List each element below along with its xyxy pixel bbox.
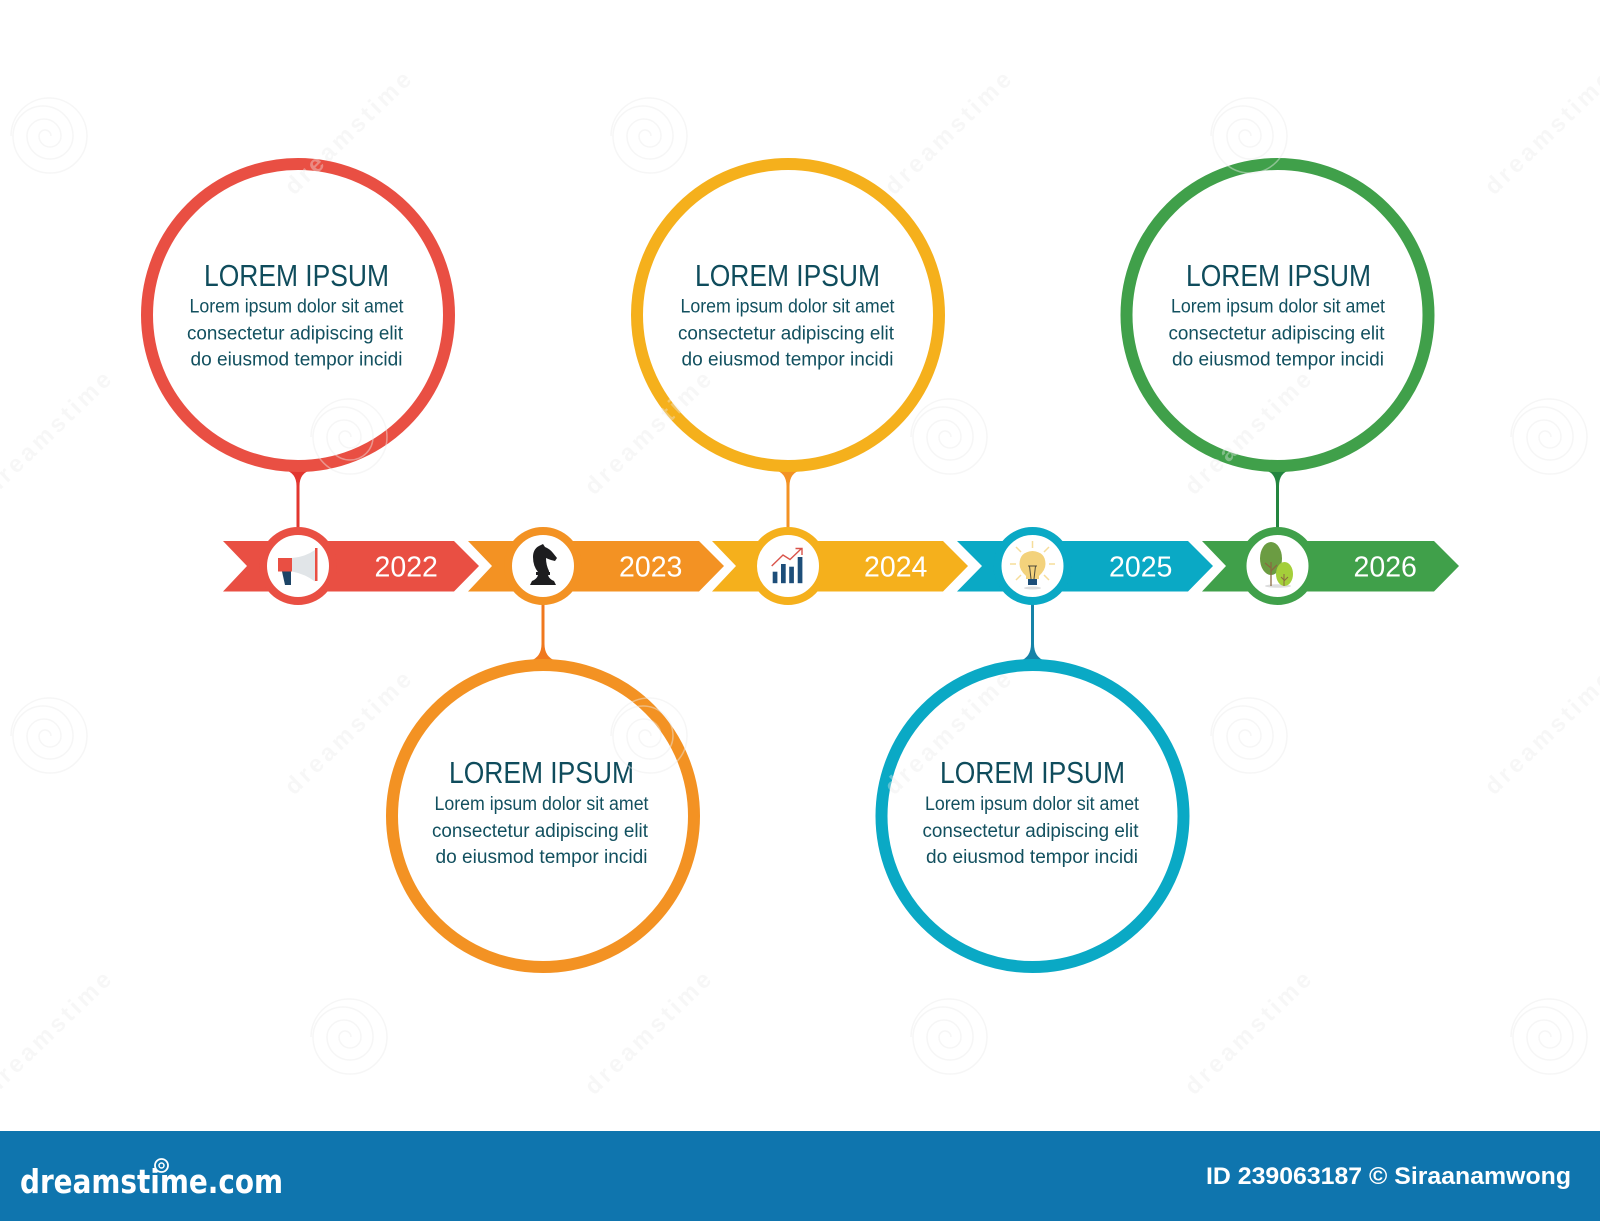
panel: 2025 callout bbox=[882, 604, 1184, 967]
text block: 2026: do eiusmod tempor incidi bbox=[1172, 350, 1384, 370]
text block: 2023: Lorem ipsum dolor sit amet bbox=[434, 794, 649, 815]
ring: 2025 bbox=[882, 665, 1184, 967]
node: 2026 bbox=[1242, 531, 1312, 601]
footer logo: dreamstime.com bbox=[20, 1162, 283, 1201]
text block: 2025: do eiusmod tempor incidi bbox=[926, 847, 1138, 868]
timeline segment: 2023 bbox=[468, 531, 724, 601]
icon: trees bbox=[1260, 542, 1293, 588]
connector: 2024 bbox=[775, 470, 801, 528]
text block: 2023 bbox=[432, 794, 649, 868]
connector: 2026 bbox=[1265, 470, 1290, 528]
year: 2026: 2026 bbox=[1354, 552, 1417, 584]
text block: 2022 bbox=[187, 296, 404, 370]
text block: 2026: consectetur adipiscing elit bbox=[1168, 324, 1385, 344]
text block: 2023: do eiusmod tempor incidi bbox=[436, 847, 648, 868]
watermark layer: dreamstime bbox=[1179, 366, 1317, 500]
year: 2022: 2022 bbox=[374, 552, 438, 584]
icon: light bulb bbox=[1010, 541, 1055, 590]
timeline segment: 2026 bbox=[1202, 531, 1459, 601]
text block: 2024: consectetur adipiscing elit bbox=[678, 324, 895, 344]
year: 2024: 2024 bbox=[864, 552, 928, 584]
connector: 2022 bbox=[285, 470, 311, 528]
text block: 2025 bbox=[922, 794, 1140, 868]
node: 2022 bbox=[263, 531, 333, 601]
heading: 2023: LOREM IPSUM bbox=[449, 755, 634, 790]
text block: 2024: do eiusmod tempor incidi bbox=[682, 350, 894, 370]
text block: 2022: consectetur adipiscing elit bbox=[187, 324, 404, 344]
arrow ribbon: 2026 bbox=[1202, 541, 1459, 592]
icon: chess knight bbox=[530, 544, 557, 585]
panel: 2026 callout bbox=[1126, 164, 1428, 528]
node: 2023 bbox=[508, 531, 578, 601]
text block: 2023: consectetur adipiscing elit bbox=[432, 821, 649, 842]
year: 2023: 2023 bbox=[619, 552, 682, 584]
timeline segment: 2022 bbox=[223, 531, 479, 601]
year: 2025: 2025 bbox=[1109, 552, 1172, 584]
footer bar bbox=[0, 1131, 1600, 1221]
watermark layer: dreamstime bbox=[879, 666, 1017, 800]
watermark layer: dreamstime bbox=[279, 666, 417, 800]
arrow ribbon: 2023 bbox=[468, 541, 724, 592]
arrow ribbon: 2025 bbox=[957, 541, 1213, 592]
arrow ribbon: 2024 bbox=[712, 541, 968, 592]
text block: 2022: Lorem ipsum dolor sit amet bbox=[190, 296, 404, 318]
text block: 2024: Lorem ipsum dolor sit amet bbox=[680, 296, 895, 318]
watermark layer: dreamstime bbox=[579, 966, 717, 1100]
watermark layer: dreamstime bbox=[1179, 966, 1317, 1100]
text block: 2022: do eiusmod tempor incidi bbox=[190, 350, 402, 370]
ring: 2022 bbox=[147, 164, 449, 466]
icon: megaphone bbox=[278, 548, 318, 585]
ring: 2024 bbox=[637, 164, 939, 466]
node: 2024 bbox=[753, 531, 823, 601]
watermark layer: dreamstime bbox=[279, 66, 417, 200]
text block: 2024 bbox=[678, 296, 895, 370]
connector: 2023 bbox=[530, 604, 556, 661]
panel: 2022 callout bbox=[147, 164, 449, 528]
footer credit: ID 239063187 © Siraanamwong bbox=[1206, 1163, 1571, 1190]
panel: 2023 callout bbox=[392, 604, 694, 967]
timeline segment: 2025 bbox=[957, 531, 1213, 601]
timeline segment: 2024 bbox=[712, 531, 968, 601]
watermark layer: dreamstime bbox=[579, 366, 717, 500]
text block: 2026 bbox=[1168, 296, 1386, 370]
ring: 2026 bbox=[1126, 164, 1428, 466]
heading: 2026: LOREM IPSUM bbox=[1186, 258, 1371, 293]
text block: 2025: consectetur adipiscing elit bbox=[922, 821, 1139, 842]
text block: 2025: Lorem ipsum dolor sit amet bbox=[925, 794, 1140, 815]
text block: 2026: Lorem ipsum dolor sit amet bbox=[1171, 296, 1386, 318]
node: 2025 bbox=[998, 531, 1068, 601]
ring: 2023 bbox=[392, 665, 694, 967]
connector: 2025 bbox=[1020, 604, 1045, 661]
watermark layer: dreamstime bbox=[879, 66, 1017, 200]
panel: 2024 callout bbox=[637, 164, 939, 528]
arrow ribbon: 2022 bbox=[223, 541, 479, 592]
heading: 2024: LOREM IPSUM bbox=[695, 258, 880, 293]
heading: 2025: LOREM IPSUM bbox=[940, 755, 1125, 790]
heading: 2022: LOREM IPSUM bbox=[204, 258, 389, 293]
icon: bar chart bbox=[772, 548, 802, 583]
